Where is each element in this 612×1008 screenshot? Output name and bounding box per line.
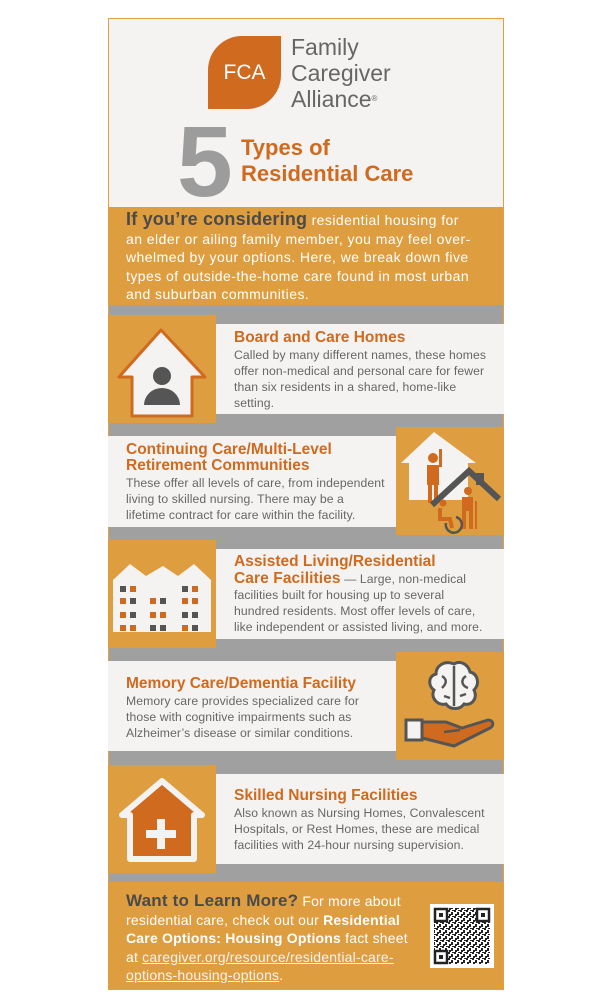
body xyxy=(234,570,482,634)
big number 5: 5 xyxy=(177,106,233,218)
intro text: whelmed by your options. Here, we break down five xyxy=(126,249,469,265)
body xyxy=(126,476,385,522)
body: lifetime contract for care within the facility. xyxy=(126,508,355,522)
body: Called by many different names, these homes xyxy=(234,348,486,362)
card xyxy=(108,18,504,990)
logo wordmark: Family xyxy=(291,34,359,60)
QR code xyxy=(430,904,494,968)
icon: medical house xyxy=(108,765,216,873)
header panel xyxy=(109,19,503,207)
logo leaf: FCA xyxy=(224,61,266,84)
body: Hospitals, or Rest Homes, these are medical xyxy=(234,822,479,836)
body: those with cognitive impairments such as xyxy=(126,710,352,724)
body: facilities built for housing up to several xyxy=(234,588,444,602)
footer text xyxy=(126,891,408,983)
body: offer non-medical and personal care for fewer xyxy=(234,364,484,378)
footer text: Want to Learn More? For more about xyxy=(126,891,401,910)
body: facilities with 24-hour nursing supervision. xyxy=(234,838,464,852)
body: Also known as Nursing Homes, Convalescent xyxy=(234,806,485,820)
footer text: at caregiver.org/resource/residential-care- xyxy=(126,948,394,964)
title: Types of xyxy=(241,135,330,160)
icon: house with person xyxy=(108,315,216,423)
heading: Board and Care Homes xyxy=(234,329,405,346)
heading: Continuing Care/Multi-Level xyxy=(126,441,332,458)
body: hundred residents. Most offer levels of care, xyxy=(234,604,475,618)
intro text: an elder or ailing family member, you may feel over- xyxy=(126,230,471,246)
heading xyxy=(126,441,332,474)
icon: community xyxy=(396,427,504,535)
logo wordmark xyxy=(291,34,391,112)
body: Care Facilities — Large, non-medical xyxy=(234,570,466,587)
body: like independent or assisted living, and more. xyxy=(234,620,482,634)
logo leaf xyxy=(208,36,281,109)
intro text: types of outside-the-home care found in most urban xyxy=(126,268,469,284)
footer text: options-housing-options. xyxy=(126,967,283,983)
body: Alzheimer’s disease or similar conditions. xyxy=(126,726,353,740)
intro text: and suburban communities. xyxy=(126,286,309,302)
panel: memory care xyxy=(108,652,503,760)
text block xyxy=(108,436,396,527)
panel: assisted living xyxy=(109,540,504,648)
title xyxy=(241,135,413,186)
intro text: If you’re considering residential housing for xyxy=(126,209,459,229)
logo wordmark: Caregiver xyxy=(291,60,391,86)
logo wordmark: Alliance® xyxy=(291,86,377,112)
icon: brain in hand xyxy=(396,652,504,760)
panel: continuing care xyxy=(108,427,503,535)
body: setting. xyxy=(234,396,274,410)
heading: Assisted Living/Residential xyxy=(234,553,436,570)
body: living to skilled nursing. There may be a xyxy=(126,492,344,506)
text block xyxy=(108,661,396,751)
intro text xyxy=(126,209,471,302)
footer panel xyxy=(109,882,503,989)
panel: board and care homes xyxy=(109,315,504,423)
heading: Memory Care/Dementia Facility xyxy=(126,675,356,692)
footer text: residential care, check out our Residential xyxy=(126,912,400,928)
heading: Retirement Communities xyxy=(126,457,309,474)
text block xyxy=(216,549,504,639)
body xyxy=(126,694,359,740)
intro panel xyxy=(109,207,503,305)
text block xyxy=(216,324,504,414)
text block xyxy=(216,774,504,864)
body xyxy=(234,348,486,410)
body xyxy=(234,806,485,852)
body: These offer all levels of care, from independent xyxy=(126,476,385,490)
body: Memory care provides specialized care for xyxy=(126,694,359,708)
footer text: Care Options: Housing Options fact sheet xyxy=(126,930,408,946)
heading: Skilled Nursing Facilities xyxy=(234,787,417,804)
body: than six residents in a shared, home-like xyxy=(234,380,456,394)
panel: skilled nursing xyxy=(109,765,504,873)
title: Residential Care xyxy=(241,161,413,186)
logo xyxy=(208,34,391,112)
icon: buildings xyxy=(108,540,216,648)
